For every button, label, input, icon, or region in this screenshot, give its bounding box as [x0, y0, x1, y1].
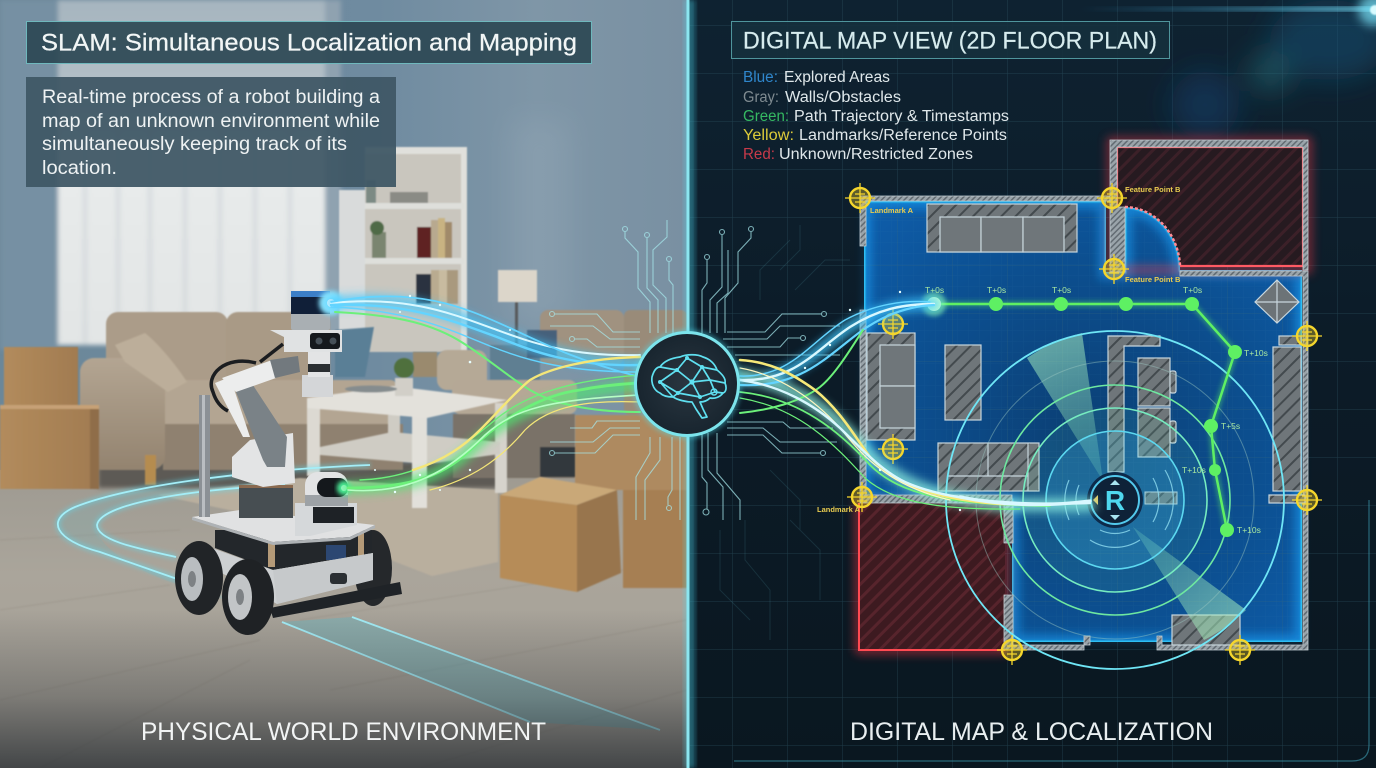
furniture: table: [945, 345, 981, 420]
text block: SLAM description: [26, 77, 396, 187]
timestamps: T+10s: [1244, 348, 1268, 358]
dark gap under furniture: [98, 462, 498, 488]
text block: SLAM description: simultaneously keeping track of its: [42, 134, 347, 155]
stream sparkles: [374, 291, 961, 511]
caption: digital map: DIGITAL MAP & LOCALIZATION: [850, 718, 1213, 746]
shade at bottom: [0, 610, 687, 768]
robot electronics layer: [215, 530, 372, 570]
radar rings: [946, 331, 1284, 669]
landmark markers: [845, 183, 1322, 665]
heading: SLAM title: SLAM: Simultaneous Localization and Mapping: [41, 30, 577, 56]
caption: physical world: PHYSICAL WORLD ENVIRONMENT: [141, 718, 546, 746]
furniture: chairs: [1138, 358, 1176, 457]
walls: [860, 140, 1308, 650]
room wall background: [0, 0, 687, 490]
floor lamp: [498, 270, 537, 352]
legend: blue: Blue:: [743, 69, 778, 86]
robot front wheel: [222, 559, 274, 635]
sofa, right side: [413, 310, 687, 478]
corner light streak: [1080, 0, 1376, 26]
unknown zone top right: [1111, 141, 1308, 270]
legend: gray: Gray:: [743, 89, 779, 106]
robot left wheel: [175, 541, 223, 615]
robot marker: [1087, 472, 1143, 528]
sofa: [80, 312, 403, 485]
legend: red: Unknown/Restricted Zones: [779, 146, 973, 163]
landmark labels: Landmark A: [817, 505, 861, 514]
heading: SLAM title: [26, 22, 592, 64]
timestamps: T+10s: [1237, 525, 1261, 535]
robot chassis: [212, 548, 373, 604]
furniture: top sofa: [927, 204, 1077, 252]
heading: digital map view: [732, 22, 1170, 58]
timestamps: T+0s: [1052, 285, 1071, 295]
floor planks: [0, 530, 687, 768]
legend: green: Path Trajectory & Timestamps: [794, 108, 1009, 125]
wall light glow: [510, 120, 570, 320]
robot pole: [199, 395, 210, 517]
robot arm: [211, 344, 333, 518]
floor: [0, 470, 687, 768]
yellow streams, right: [740, 360, 1060, 504]
blue streams, right: [740, 302, 934, 385]
robot bumper: [270, 582, 402, 618]
path trajectory: [922, 292, 1242, 537]
icon: brain: [652, 355, 726, 418]
text block: SLAM description: map of an unknown environment while: [42, 111, 380, 132]
explored area glow: [864, 201, 1302, 642]
centre divider line: [684, 0, 692, 768]
landmark labels: Feature Point B: [1125, 185, 1181, 194]
landmark labels: [817, 185, 1181, 514]
floor light trail: [56, 465, 660, 730]
yellow streams, left: [413, 357, 640, 490]
blue streams, left: [331, 296, 640, 377]
furniture: L-shaped counter: [1108, 336, 1160, 472]
robot lidar: [291, 291, 343, 330]
robot rear wheel: [354, 530, 392, 606]
furniture: bottom box: [1172, 615, 1240, 645]
legend: [743, 69, 1009, 163]
text block: SLAM description: Real-time process of a robot building a: [42, 87, 380, 108]
furniture: diamond: [1255, 280, 1299, 323]
legend: yellow: Landmarks/Reference Points: [799, 127, 1007, 144]
legend: gray: [743, 89, 901, 106]
landmark labels: Feature Point B: [1125, 275, 1181, 284]
left edge glow: [690, 0, 696, 768]
floor plan: [817, 140, 1322, 669]
cyan stream to robot marker: [740, 380, 1090, 505]
legend: yellow: Yellow:: [743, 127, 794, 144]
timestamps: T+0s: [987, 285, 1006, 295]
furniture: small bar: [1145, 492, 1177, 504]
data streams from robot through the brain to the map: [331, 291, 1090, 511]
green streams, left: [335, 312, 640, 491]
unknown zone bottom left: [859, 503, 1005, 650]
landmark labels: Landmark A: [870, 206, 914, 215]
panel frame: [734, 500, 1369, 761]
dark background: [690, 0, 1376, 768]
furniture: left sofa: [867, 333, 915, 440]
timestamps: T+0s: [1183, 285, 1202, 295]
robot deck sensor: [295, 472, 357, 536]
blueprint grid: [690, 0, 1376, 768]
faint background circuit traces: [720, 225, 850, 640]
legend: green: Green:: [743, 108, 789, 125]
robot: [175, 291, 402, 635]
furniture: right cabinet: [1269, 336, 1305, 503]
legend: blue: Explored Areas: [784, 69, 890, 86]
legend: gray: Walls/Obstacles: [785, 89, 901, 106]
panel: digital map and localization: [690, 0, 1376, 768]
radar sweep wedges: [1027, 333, 1246, 640]
stream glow: [331, 301, 1090, 505]
timestamps: T+0s: [925, 285, 944, 295]
timestamps: T+5s: [1221, 421, 1240, 431]
robot deck plate: [192, 510, 375, 542]
window curtains: [0, 0, 341, 350]
robot marker: R: [1105, 485, 1125, 516]
rug: [158, 478, 498, 576]
legend: red: Red:: [743, 146, 775, 163]
heading: digital map view: DIGITAL MAP VIEW (2D FLOOR PLAN): [743, 28, 1157, 54]
circuit traces around the processing core: [550, 220, 840, 520]
lens glow blobs: [1171, 0, 1376, 139]
robot head camera: [270, 330, 342, 352]
green streams, right: [740, 330, 1050, 509]
coffee table: [307, 358, 507, 508]
furniture: bottom couch: [938, 443, 1039, 491]
panel: physical world environment: [0, 0, 687, 768]
timestamps: [925, 285, 1268, 535]
timestamps: T+10s: [1182, 465, 1206, 475]
explored area blue: [860, 198, 1306, 648]
brain processing core: [632, 329, 742, 439]
right cardboard boxes: [500, 415, 687, 592]
text block: SLAM description: location.: [42, 158, 117, 179]
left cardboard boxes: [0, 347, 99, 489]
bookshelf: [339, 147, 467, 352]
